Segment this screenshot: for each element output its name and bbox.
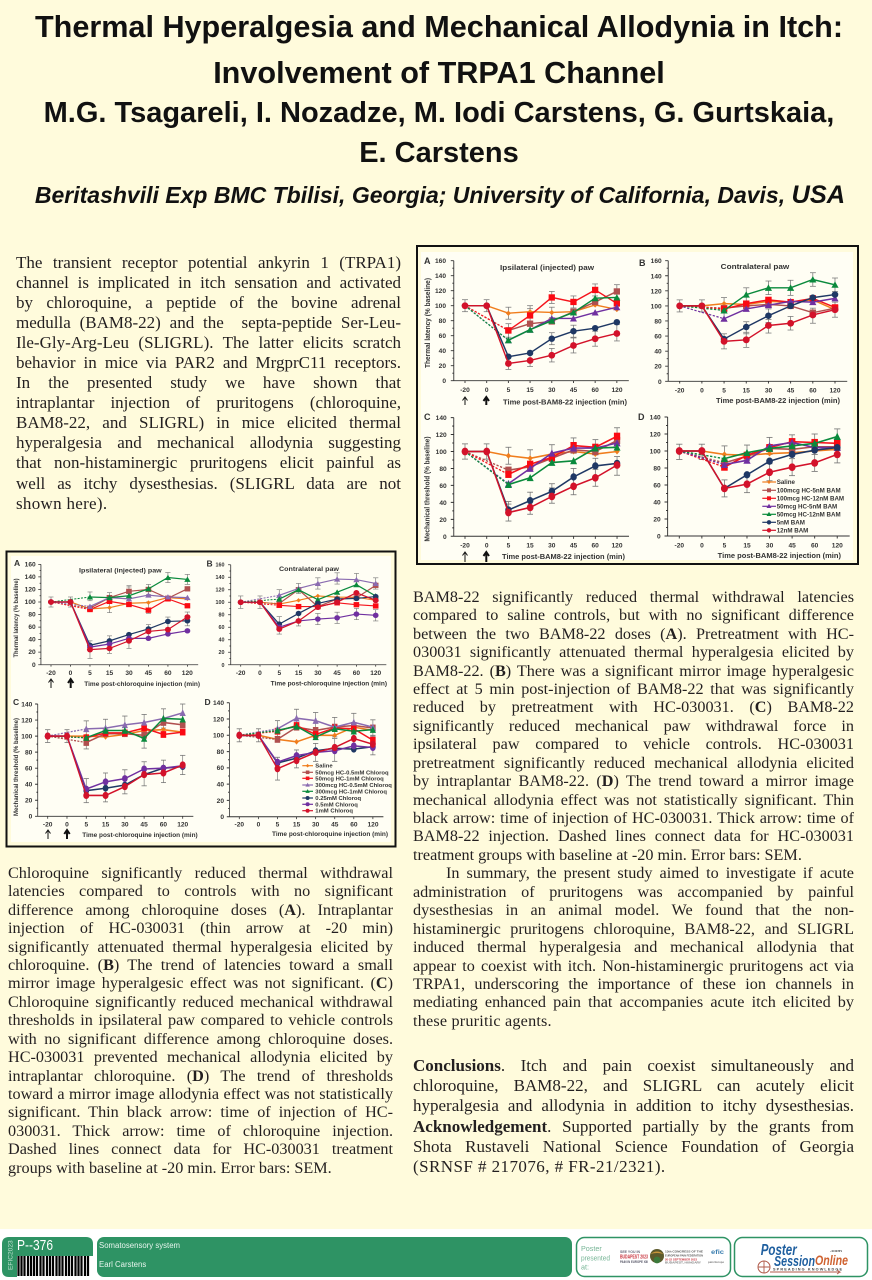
text block: conclusions and acknowledgement: (SRNSF # 217076, # FR-21/2321). xyxy=(413,1157,666,1176)
chart A: ipsilateral thermal latency: 0 xyxy=(32,662,36,669)
chart A: ipsilateral thermal latency: 60 xyxy=(439,333,446,340)
legend: BAM8-22 groups: 100mcg HC-12nM BAM xyxy=(777,495,844,502)
footer: Poster Session Online logo box: .com xyxy=(830,1248,843,1253)
chart B: contralateral thermal latency: 0 xyxy=(700,388,704,394)
text block: chloroquine figure caption xyxy=(8,864,393,1177)
chart B: contralateral thermal latency: 30 xyxy=(314,670,322,677)
chart D: contralateral mechanical threshold: D xyxy=(638,412,645,422)
footer: Poster Session Online logo box: SPREADING KNOWLEDGE xyxy=(773,1268,842,1272)
text block: conclusions and acknowledgement: chloroquine, BAM8-22, and SLIGRL can acutely elicit xyxy=(413,1076,854,1095)
chart C: ipsilateral mechanical threshold: 0 xyxy=(65,822,69,828)
chart C: ipsilateral mechanical threshold: 40 xyxy=(439,500,447,507)
footer: poster presented at box: Poster xyxy=(581,1244,602,1253)
chart A: ipsilateral thermal latency: 140 xyxy=(435,273,446,280)
chart A: ipsilateral thermal latency: 0 xyxy=(485,387,489,394)
chart D: contralateral mechanical threshold: 30 xyxy=(312,822,320,829)
chart C: ipsilateral mechanical threshold: 80 xyxy=(25,749,33,756)
chart B: contralateral thermal latency: 5 xyxy=(722,388,726,394)
chart B: contralateral thermal latency: 120 xyxy=(651,288,662,295)
chart B: contralateral thermal latency: 40 xyxy=(218,638,224,644)
legend: BAM8-22 groups: 12nM BAM xyxy=(777,527,808,534)
chart B: contralateral thermal latency: 40 xyxy=(654,349,662,356)
chart D: contralateral mechanical threshold: 5 xyxy=(723,542,727,550)
chart A: ipsilateral thermal latency: 40 xyxy=(439,348,446,355)
chart C: ipsilateral mechanical threshold: 5 xyxy=(507,542,511,550)
title: Beritashvili Exp BMC Tbilisi, Georgia; University of California, Davis, USA xyxy=(35,181,845,209)
chart B: contralateral thermal latency: 120 xyxy=(370,670,382,677)
chart B: contralateral thermal latency: 60 xyxy=(353,670,360,677)
chart D: contralateral mechanical threshold: 120 xyxy=(367,822,379,829)
chart B: contralateral thermal latency: 45 xyxy=(787,388,795,394)
chart C: ipsilateral mechanical threshold: 0 xyxy=(443,534,447,541)
text block: chloroquine figure caption: with no significant difference among chloroquine doses. xyxy=(8,1030,393,1048)
chart A: ipsilateral thermal latency: 40 xyxy=(28,637,36,644)
chart C: ipsilateral mechanical threshold: 15 xyxy=(526,542,534,550)
chart D: contralateral mechanical threshold: 20 xyxy=(653,516,661,524)
text block: abstract introduction: channel is implicated in itch sensation and activated xyxy=(16,273,401,292)
chart D: contralateral mechanical threshold: 20 xyxy=(217,798,224,805)
text block: BAM8-22 figure caption and summary: pretreatment significantly reduced mechanical allodynia elicited xyxy=(413,754,854,772)
chart C: ipsilateral mechanical threshold: Time post-BAM8-22 injection (min) xyxy=(502,554,625,561)
legend: BAM8-22 groups: Saline xyxy=(777,479,795,486)
chart D: contralateral mechanical threshold: 45 xyxy=(331,822,339,829)
legend: chloroquine groups: 50mcg HC-1mM Chloroq xyxy=(315,776,384,782)
chart D: contralateral mechanical threshold: 40 xyxy=(217,782,224,788)
text block: abstract introduction: medulla (BAM8-22) and the septa-peptide Ser-Leu- xyxy=(16,313,401,332)
chart A: ipsilateral thermal latency: 45 xyxy=(145,670,152,677)
legend: BAM8-22 groups: 100mcg HC-5nM BAM xyxy=(777,487,841,494)
chart B: contralateral thermal latency: 0 xyxy=(222,663,224,669)
chart D: contralateral mechanical threshold: 60 xyxy=(653,482,661,490)
footer: Poster Session Online logo box xyxy=(734,1236,868,1278)
chart C: ipsilateral mechanical threshold: 20 xyxy=(25,797,33,804)
text block: chloroquine figure caption: mirror image hyperalgesic effect was not significant. (C) xyxy=(8,974,393,992)
legend: chloroquine groups: 300mcg HC-0.5mM Chloroq xyxy=(315,783,392,789)
footer: poster presented at box: 13th CONGRESS OF THE xyxy=(665,1250,703,1254)
chart C: ipsilateral mechanical threshold: 30 xyxy=(548,542,556,550)
chart D: contralateral mechanical threshold: 60 xyxy=(350,822,358,829)
text block: abstract introduction: well as itchy dysesthesias. (SLIGRL data are not xyxy=(16,474,401,493)
chart A: ipsilateral thermal latency: -20 xyxy=(46,670,56,677)
chart A: ipsilateral thermal latency: 160 xyxy=(435,258,446,265)
legend: BAM8-22 groups: 50mcg HC-12nM BAM xyxy=(777,511,841,518)
text block: BAM8-22 figure caption and summary: histaminergic pruritogens chloroquine, BAM8-22, and SLIGRL xyxy=(413,920,854,938)
figure: BAM8-22 charts xyxy=(416,245,859,565)
text block: abstract introduction: In the presented study we have shown that xyxy=(16,373,401,392)
footer: poster presented at box: EUROPEAN PAIN FEDERATION xyxy=(665,1254,703,1258)
text block: conclusions and acknowledgement: Shota Rustaveli National Science Foundation of Georgia xyxy=(413,1137,854,1156)
chart D: contralateral mechanical threshold: 0 xyxy=(657,534,661,540)
figure: chloroquine charts xyxy=(6,550,396,848)
text block: BAM8-22 figure caption and summary: between the two BAM8-22 doses (A). Pretreatment with HC- xyxy=(413,625,854,643)
chart B: contralateral thermal latency xyxy=(206,558,387,688)
text block: chloroquine figure caption: intraplantar chloroquine. (D) The trend of thresholds xyxy=(8,1067,393,1085)
chart A: ipsilateral thermal latency: 60 xyxy=(164,670,172,677)
chart B: contralateral thermal latency: Contralateral paw xyxy=(279,566,340,573)
chart C: ipsilateral mechanical threshold: 0 xyxy=(29,814,33,820)
chart A: ipsilateral thermal latency xyxy=(424,256,629,406)
title xyxy=(35,10,845,209)
footer: poster presented at box: pain Europe xyxy=(708,1260,724,1264)
chart B: contralateral thermal latency: -20 xyxy=(236,670,246,677)
chart A: ipsilateral thermal latency: 0 xyxy=(69,670,73,677)
chart A: ipsilateral thermal latency: 20 xyxy=(28,649,36,656)
text block: abstract introduction xyxy=(16,253,401,513)
chart D: contralateral mechanical threshold: 120 xyxy=(213,716,224,723)
chart D: contralateral mechanical threshold: 140 xyxy=(213,700,224,707)
chart B: contralateral thermal latency: 80 xyxy=(218,613,224,619)
text block: BAM8-22 figure caption and summary: mediating enhanced pain that accompanies acute itch elicited by xyxy=(413,993,854,1011)
chart B: contralateral thermal latency: 15 xyxy=(743,388,750,394)
text block: abstract introduction: hyperalgesia and mechanical allodynia suggesting xyxy=(16,433,401,452)
chart B: contralateral thermal latency: 140 xyxy=(651,273,662,280)
legend: chloroquine groups: 300mcg HC-1mM Chloroq xyxy=(315,789,387,795)
text block: BAM8-22 figure caption and summary: mechanical allodynia effect was not statistically significant. Thin xyxy=(413,791,854,809)
chart A: ipsilateral thermal latency: 30 xyxy=(548,387,556,394)
text block: chloroquine figure caption: HC-030031 prevented mechanical allodynia elicited by xyxy=(8,1048,393,1066)
chart D: contralateral mechanical threshold xyxy=(638,412,850,560)
footer: poster presented at box: presented xyxy=(581,1254,610,1262)
text block: chloroquine figure caption: Chloroquine significantly reduced thermal withdrawal xyxy=(8,864,393,882)
chart C: ipsilateral mechanical threshold: 45 xyxy=(140,822,148,828)
chart C: ipsilateral mechanical threshold: 15 xyxy=(102,822,110,828)
text block: BAM8-22 figure caption and summary: BAM8-22 significantly reduced thermal withdrawal latencies xyxy=(413,588,854,606)
legend: chloroquine groups: 0.5mM Chloroq xyxy=(315,802,358,808)
chart A: ipsilateral thermal latency: Time post-chloroquine injection (min) xyxy=(84,681,200,688)
chart D: contralateral mechanical threshold: 120 xyxy=(832,542,843,550)
text block: chloroquine figure caption: latencies compared to controls with no significant xyxy=(8,882,393,900)
chart D: contralateral mechanical threshold: 30 xyxy=(766,542,774,550)
footer: poster presented at box: PAIN IN EUROPE XIII xyxy=(620,1260,648,1264)
text block: BAM8-22 figure caption and summary: administration of pruritogens was accompanied by painful xyxy=(413,883,854,901)
chart A: ipsilateral thermal latency: 5 xyxy=(507,387,511,394)
text block: chloroquine figure caption: thresholds in ipsilateral paw compared to vehicle controls xyxy=(8,1011,393,1029)
chart A: ipsilateral thermal latency: 120 xyxy=(611,387,623,394)
chart B: contralateral thermal latency: 140 xyxy=(216,575,224,581)
chart A: ipsilateral thermal latency: 160 xyxy=(25,562,36,569)
chart A: ipsilateral thermal latency: A xyxy=(424,256,431,266)
text block: chloroquine figure caption: chloroquine. (B) The trend of latencies toward a small xyxy=(8,956,393,974)
chart C: ipsilateral mechanical threshold: 140 xyxy=(21,701,33,708)
chart D: contralateral mechanical threshold: -20 xyxy=(675,542,684,550)
text block: conclusions and acknowledgement: Acknowledgement. Supported partially by the grants from xyxy=(413,1117,854,1136)
chart C: ipsilateral mechanical threshold: 0 xyxy=(485,542,489,550)
chart C: ipsilateral mechanical threshold: 5 xyxy=(84,822,88,828)
chart C: ipsilateral mechanical threshold: 30 xyxy=(121,822,129,828)
title: Thermal Hyperalgesia and Mechanical Allodynia in Itch: xyxy=(35,10,843,44)
chart D: contralateral mechanical threshold xyxy=(204,697,388,838)
footer: Poster Session Online logo box: Session xyxy=(774,1253,815,1270)
chart D: contralateral mechanical threshold: -20 xyxy=(235,822,244,829)
chart D: contralateral mechanical threshold: 15 xyxy=(743,542,751,550)
chart A: ipsilateral thermal latency: 5 xyxy=(88,670,92,677)
text block: chloroquine figure caption: injection of HC-030031 (thin arrow at -20 min) xyxy=(8,919,393,937)
chart A: ipsilateral thermal latency: Ipsilateral (injected) paw xyxy=(79,568,163,574)
text block: BAM8-22 figure caption and summary: BAM8-22 injection. Dashed lines connect data for HC-030031 xyxy=(413,827,854,845)
chart C: ipsilateral mechanical threshold: 80 xyxy=(439,466,447,473)
title: M.G. Tsagareli, I. Nozadze, M. Iodi Carstens, G. Gurtskaia, xyxy=(44,97,834,129)
chart B: contralateral thermal latency: 5 xyxy=(277,670,281,677)
chart C: ipsilateral mechanical threshold: 120 xyxy=(436,432,447,439)
chart B: contralateral thermal latency: 20 xyxy=(654,364,662,371)
chart D: contralateral mechanical threshold: 80 xyxy=(217,749,224,756)
legend: chloroquine groups: 50mcg HC-0.5mM Chloroq xyxy=(315,770,389,776)
legend: chloroquine groups xyxy=(302,764,392,815)
text block: chloroquine figure caption: significant. Thin black arrow: time of injection of HC- xyxy=(8,1103,393,1121)
text block: conclusions and acknowledgement: hyperalgesia and allodynia in addition to itchy dysesthesias. xyxy=(413,1096,854,1115)
chart C: ipsilateral mechanical threshold xyxy=(13,697,198,839)
chart D: contralateral mechanical threshold: 60 xyxy=(217,765,224,772)
chart B: contralateral thermal latency: Contralateral paw xyxy=(721,262,790,271)
text block: BAM8-22 figure caption and summary: effect at 5 min post-injection of BAM8-22 that was significantly xyxy=(413,680,854,698)
text block: BAM8-22 figure caption and summary: reduced by pretreatment with HC-030031. (C) BAM8-22 xyxy=(413,698,854,716)
chart D: contralateral mechanical threshold: D xyxy=(204,697,211,707)
chart C: ipsilateral mechanical threshold: 60 xyxy=(439,483,447,490)
chart D: contralateral mechanical threshold: 15 xyxy=(293,822,301,829)
chart C: ipsilateral mechanical threshold: 120 xyxy=(21,717,33,724)
chart C: ipsilateral mechanical threshold: 140 xyxy=(436,415,447,422)
chart C: ipsilateral mechanical threshold: Mechanical threshold (% baseline) xyxy=(424,436,432,542)
footer: poster badge with barcode: P--376 xyxy=(17,1238,53,1254)
text block: BAM8-22 figure caption and summary: induced thermal hyperalgesia and mechanical allodynia that xyxy=(413,938,854,956)
text block: abstract introduction: behavior in mice via PAR2 and MrgprC11 receptors. xyxy=(16,353,401,372)
legend: BAM8-22 groups: 50mcg HC-5nM BAM xyxy=(777,503,837,510)
footer: poster presented at box: SEE YOU IN xyxy=(620,1249,640,1254)
chart A: ipsilateral thermal latency: 20 xyxy=(439,363,446,370)
chart B: contralateral thermal latency: 120 xyxy=(829,388,841,394)
footer: topic and author bar: Somatosensory system xyxy=(99,1241,180,1250)
chart A: ipsilateral thermal latency: -20 xyxy=(460,387,470,394)
chart A: ipsilateral thermal latency: 15 xyxy=(106,670,113,677)
chart A: ipsilateral thermal latency: Ipsilateral (injected) paw xyxy=(500,263,594,272)
text block: BAM8-22 figure caption and summary xyxy=(413,588,854,1030)
footer: poster presented at box: BUDAPEST, HUNGARY xyxy=(665,1260,701,1264)
text block: BAM8-22 figure caption and summary: compared to saline controls, but with no significant difference xyxy=(413,606,854,624)
footer: poster badge with barcode: EFIC2023 xyxy=(8,1240,14,1270)
chart C: ipsilateral mechanical threshold: 60 xyxy=(160,822,167,828)
text block: chloroquine figure caption: 030031. Thick arrow: time of chloroquine injection. xyxy=(8,1122,393,1140)
chart A: ipsilateral thermal latency: 140 xyxy=(25,574,36,581)
chart A: ipsilateral thermal latency xyxy=(13,558,200,688)
chart C: ipsilateral mechanical threshold: C xyxy=(424,412,431,422)
text block: BAM8-22 figure caption and summary: 030031 significantly attenuated thermal hyperalgesia elicited by xyxy=(413,643,854,661)
text block: BAM8-22 figure caption and summary: by intraplantar BAM8-22. (D) The trend toward a mirror image xyxy=(413,772,854,790)
text block: abstract introduction: that non-histaminergic pruritogens elicit painful as xyxy=(16,453,401,472)
text block: abstract introduction: The transient receptor potential ankyrin 1 (TRPA1) xyxy=(16,253,401,272)
chart B: contralateral thermal latency: B xyxy=(206,558,213,568)
chart A: ipsilateral thermal latency: Time post-BAM8-22 injection (min) xyxy=(503,400,627,406)
chart C: ipsilateral mechanical threshold: Time post-chloroquine injection (min) xyxy=(82,832,198,839)
chart B: contralateral thermal latency: 20 xyxy=(218,650,224,656)
chart A: ipsilateral thermal latency: 100 xyxy=(25,599,36,606)
legend: chloroquine groups: 1mM Chloroq xyxy=(315,809,353,815)
text block: abstract introduction: Ile-Gly-Arg-Leu (SLIGRL). The latter elicits scratch xyxy=(16,333,401,352)
footer: Poster Session Online logo box: Poster xyxy=(761,1242,797,1259)
chart A: ipsilateral thermal latency: 120 xyxy=(25,586,36,594)
footer: poster badge with barcode xyxy=(2,1237,93,1277)
chart C: ipsilateral mechanical threshold: 40 xyxy=(25,781,33,788)
text block: chloroquine figure caption: Chloroquine significantly reduced mechanical withdrawal xyxy=(8,993,393,1011)
chart A: ipsilateral thermal latency: 45 xyxy=(570,387,577,394)
text block: BAM8-22 figure caption and summary: dysesthesias in an animal model. We found that the non- xyxy=(413,901,854,919)
chart A: ipsilateral thermal latency: 30 xyxy=(125,670,133,677)
footer: poster presented at box: 20-22 SEPTEMBER 2023 xyxy=(665,1258,697,1262)
chart C: ipsilateral mechanical threshold: 120 xyxy=(611,542,623,550)
chart C: ipsilateral mechanical threshold: Mechanical threshold (% baseline) xyxy=(13,718,20,816)
chart A: ipsilateral thermal latency: 60 xyxy=(592,387,599,394)
chart B: contralateral thermal latency: 15 xyxy=(295,670,303,677)
chart C: ipsilateral mechanical threshold: -20 xyxy=(43,822,53,828)
legend: BAM8-22 groups: 5nM BAM xyxy=(777,519,805,526)
chart B: contralateral thermal latency: 30 xyxy=(765,388,772,394)
chart D: contralateral mechanical threshold: 120 xyxy=(650,432,661,438)
chart D: contralateral mechanical threshold: 5 xyxy=(276,822,280,829)
chart D: contralateral mechanical threshold: 45 xyxy=(789,542,796,550)
chart C: ipsilateral mechanical threshold xyxy=(424,412,629,562)
chart D: contralateral mechanical threshold: 0 xyxy=(257,822,261,829)
chart C: ipsilateral mechanical threshold: 60 xyxy=(592,542,599,550)
text block: BAM8-22 figure caption and summary: appear to coexist with itch. Non-histaminergic pruritogens act via xyxy=(413,957,854,975)
chart D: contralateral mechanical threshold: 0 xyxy=(700,542,704,550)
title: Involvement of TRPA1 Channel xyxy=(213,56,665,90)
chart D: contralateral mechanical threshold: Time post-chloroquine injection (min) xyxy=(272,831,388,838)
chart A: ipsilateral thermal latency: Thermal latency (% baseline) xyxy=(13,578,20,658)
chart A: ipsilateral thermal latency: 80 xyxy=(439,318,446,325)
chart D: contralateral mechanical threshold: 40 xyxy=(653,500,661,506)
chart B: contralateral thermal latency: Time post-chloroquine injection (min) xyxy=(271,680,387,688)
chart B: contralateral thermal latency xyxy=(639,258,847,405)
chart C: ipsilateral mechanical threshold: -20 xyxy=(460,542,470,550)
text block: chloroquine figure caption: groups with baseline at -20 min. Error bars: SEM. xyxy=(8,1159,332,1177)
chart A: ipsilateral thermal latency: A xyxy=(14,558,20,568)
text block: chloroquine figure caption: difference among chloroquine doses (A). Intraplantar xyxy=(8,901,393,919)
chart A: ipsilateral thermal latency: 100 xyxy=(435,303,446,310)
chart B: contralateral thermal latency: 100 xyxy=(216,600,224,606)
title: E. Carstens xyxy=(359,137,519,169)
text block: chloroquine figure caption: Dashed lines connect data for HC-030031 treatment xyxy=(8,1140,393,1158)
chart D: contralateral mechanical threshold: 100 xyxy=(213,733,224,740)
chart A: ipsilateral thermal latency: 0 xyxy=(442,378,446,385)
chart A: ipsilateral thermal latency: 120 xyxy=(435,288,446,295)
text block: abstract introduction: BAM8-22, and SLIGRL) in mice elicited thermal xyxy=(16,413,401,432)
chart D: contralateral mechanical threshold: Time post-BAM8-22 injection (min) xyxy=(718,553,841,560)
text block: conclusions and acknowledgement xyxy=(413,1056,854,1176)
chart D: contralateral mechanical threshold: 60 xyxy=(811,542,819,550)
chart C: ipsilateral mechanical threshold: 120 xyxy=(177,822,189,828)
chart A: ipsilateral thermal latency: 60 xyxy=(28,624,36,631)
text block: conclusions and acknowledgement: Conclusions. Itch and pain coexist simultaneously and xyxy=(413,1056,854,1075)
legend: chloroquine groups: Saline xyxy=(315,764,333,770)
text block: BAM8-22 figure caption and summary: ipsilateral paw compared to vehicle controls. HC-030031 xyxy=(413,735,854,753)
footer: topic and author bar xyxy=(97,1237,572,1277)
chart A: ipsilateral thermal latency: 120 xyxy=(182,670,193,677)
text block: BAM8-22 figure caption and summary: significantly reduced mechanical paw withdrawal force in xyxy=(413,717,854,735)
chart A: ipsilateral thermal latency: 15 xyxy=(526,387,534,394)
chart C: ipsilateral mechanical threshold: 100 xyxy=(436,449,447,456)
chart B: contralateral thermal latency: 100 xyxy=(651,303,662,310)
chart B: contralateral thermal latency: 0 xyxy=(658,379,662,386)
legend: chloroquine groups: 0.25mM Chloroq xyxy=(315,796,362,802)
chart B: contralateral thermal latency: 120 xyxy=(216,588,224,594)
text block: BAM8-22 figure caption and summary: In summary, the present study aimed to investigate if acute xyxy=(446,864,854,882)
chart B: contralateral thermal latency: 60 xyxy=(654,334,662,340)
text block: BAM8-22 figure caption and summary: these pruritic agents. xyxy=(413,1012,552,1030)
chart C: ipsilateral mechanical threshold: 45 xyxy=(570,542,577,550)
footer: topic and author bar: Earl Carstens xyxy=(99,1260,146,1269)
chart B: contralateral thermal latency: 160 xyxy=(216,563,224,569)
chart D: contralateral mechanical threshold: 100 xyxy=(650,448,661,456)
chart C: ipsilateral mechanical threshold: C xyxy=(13,697,19,707)
chart A: ipsilateral thermal latency: 80 xyxy=(28,612,36,619)
chart D: contralateral mechanical threshold: 0 xyxy=(220,814,224,821)
text block: abstract introduction: shown here). xyxy=(16,494,107,513)
chart B: contralateral thermal latency: 0 xyxy=(258,670,262,677)
chart B: contralateral thermal latency: 80 xyxy=(654,318,662,325)
chart C: ipsilateral mechanical threshold: 20 xyxy=(439,517,447,524)
text block: abstract introduction: intraplantar injection of pruritogens (chloroquine, xyxy=(16,393,401,412)
chart B: contralateral thermal latency: 160 xyxy=(651,258,662,265)
chart B: contralateral thermal latency: B xyxy=(639,258,646,268)
footer: poster presented at box xyxy=(576,1236,732,1278)
text block: abstract introduction: by chloroquine, a peptide of the bovine adrenal xyxy=(16,293,401,312)
text block: BAM8-22 figure caption and summary: treatment groups with baseline at -20 min. Error bars: SEM. xyxy=(413,846,802,864)
footer: poster presented at box: at: xyxy=(581,1262,589,1272)
chart B: contralateral thermal latency: 60 xyxy=(809,388,817,394)
chart C: ipsilateral mechanical threshold: 100 xyxy=(21,733,33,740)
footer: Poster Session Online logo box: Online xyxy=(815,1252,848,1268)
chart A: ipsilateral thermal latency: Thermal latency (% baseline) xyxy=(425,278,432,368)
text block: chloroquine figure caption: significantly attenuated thermal hyperalgesia elicited by xyxy=(8,938,393,956)
chart D: contralateral mechanical threshold: 80 xyxy=(653,466,661,472)
chart B: contralateral thermal latency: -20 xyxy=(675,388,685,394)
chart D: contralateral mechanical threshold: 140 xyxy=(650,414,661,422)
text block: chloroquine figure caption: toward a mirror image allodynia effect was not statistically xyxy=(8,1085,393,1103)
chart B: contralateral thermal latency: 60 xyxy=(218,625,224,631)
chart B: contralateral thermal latency: 45 xyxy=(333,670,341,677)
chart C: ipsilateral mechanical threshold: 60 xyxy=(25,765,33,772)
text block: BAM8-22 figure caption and summary: black arrow: time of injection of HC-030031. Thick arrow: time of xyxy=(413,809,854,827)
chart B: contralateral thermal latency: Time post-BAM8-22 injection (min) xyxy=(716,398,840,405)
text block: BAM8-22 figure caption and summary: BAM8-22. (B) There was a significant mirror image hyperalgesic xyxy=(413,662,854,680)
legend: BAM8-22 groups xyxy=(762,479,844,534)
footer: poster presented at box: BUDAPEST 2023 xyxy=(620,1254,648,1260)
text block: BAM8-22 figure caption and summary: TRPA1, underscoring the importance of these ion channels in xyxy=(413,975,854,993)
footer: poster presented at box: efic xyxy=(711,1250,725,1256)
